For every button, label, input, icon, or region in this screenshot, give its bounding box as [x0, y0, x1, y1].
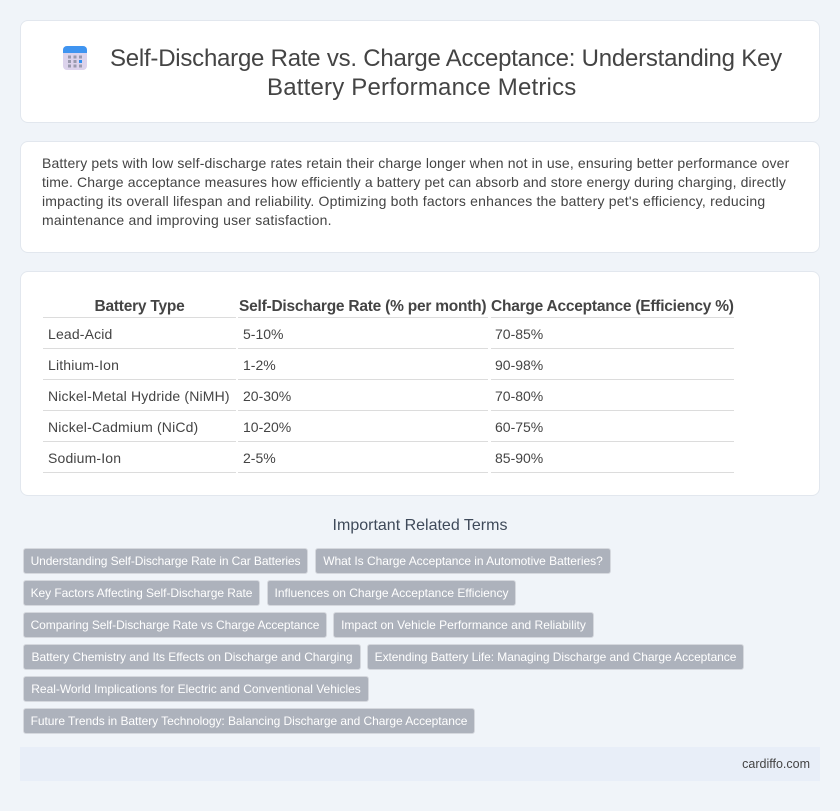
table rows: Lead-Acid: [48, 326, 112, 342]
table rows: 5-10%: [243, 326, 283, 342]
table rows: 70-85%: [495, 326, 543, 342]
related terms tags: Extending Battery Life: Managing Discharge and Charge Acceptance: [375, 650, 736, 664]
icon: calendar grid: [63, 46, 87, 70]
table rows: Lithium-Ion: [48, 357, 119, 373]
panel: comparison table: [20, 271, 820, 496]
table rows: Nickel-Metal Hydride (NiMH): [48, 388, 230, 404]
intro paragraph: [42, 155, 790, 228]
intro paragraph: time. Charge acceptance measures how efficiently a battery pet can absorb and store energy during charging, directly: [42, 174, 786, 190]
table rows: 2-5%: [243, 450, 276, 466]
related terms tags: Key Factors Affecting Self-Discharge Rate: [31, 586, 252, 600]
related terms heading: Important Related Terms: [333, 517, 507, 534]
related terms tags: Comparing Self-Discharge Rate vs Charge Acceptance: [31, 618, 319, 632]
intro paragraph: Battery pets with low self-discharge rates retain their charge longer when not in use, ensuring better performance over: [42, 155, 789, 171]
related terms tags: Understanding Self-Discharge Rate in Car Batteries: [31, 554, 300, 568]
table header: Self-Discharge Rate (% per month): [239, 298, 486, 315]
related terms tags: What Is Charge Acceptance in Automotive Batteries?: [323, 554, 603, 568]
title: [110, 45, 782, 101]
table rows: 70-80%: [495, 388, 543, 404]
related terms tags: Impact on Vehicle Performance and Reliability: [341, 618, 586, 632]
table rows: 60-75%: [495, 419, 543, 435]
table rows: 85-90%: [495, 450, 543, 466]
table header: [94, 298, 734, 315]
panel: intro text: [20, 141, 820, 253]
table rows: 10-20%: [243, 419, 291, 435]
table rows: 1-2%: [243, 357, 276, 373]
related terms tags: Battery Chemistry and Its Effects on Discharge and Charging: [32, 650, 352, 664]
table rows: 20-30%: [243, 388, 291, 404]
intro paragraph: impacting its overall lifespan and reliability. Optimizing both factors enhances the battery pet's efficiency, reducing: [42, 193, 765, 209]
header card: [20, 20, 820, 123]
table header: Battery Type: [94, 298, 184, 315]
title: Battery Performance Metrics: [267, 74, 576, 101]
table rows: [48, 326, 543, 466]
related terms tags: Influences on Charge Acceptance Efficiency: [275, 586, 508, 600]
table rows: 90-98%: [495, 357, 543, 373]
table header: Charge Acceptance (Efficiency %): [491, 298, 734, 315]
related terms tags: Real-World Implications for Electric and Conventional Vehicles: [31, 682, 361, 696]
title: Self-Discharge Rate vs. Charge Acceptance: Understanding Key: [110, 45, 782, 72]
related terms tags: [23, 548, 744, 734]
footer source: cardiffo.com: [742, 757, 810, 771]
table: [43, 317, 734, 473]
table rows: Sodium-Ion: [48, 450, 121, 466]
table rows: Nickel-Cadmium (NiCd): [48, 419, 198, 435]
related terms tags: Future Trends in Battery Technology: Balancing Discharge and Charge Acceptance: [31, 714, 467, 728]
footer bar: [20, 747, 820, 781]
intro paragraph: maintenance and improving user satisfaction.: [42, 212, 332, 228]
